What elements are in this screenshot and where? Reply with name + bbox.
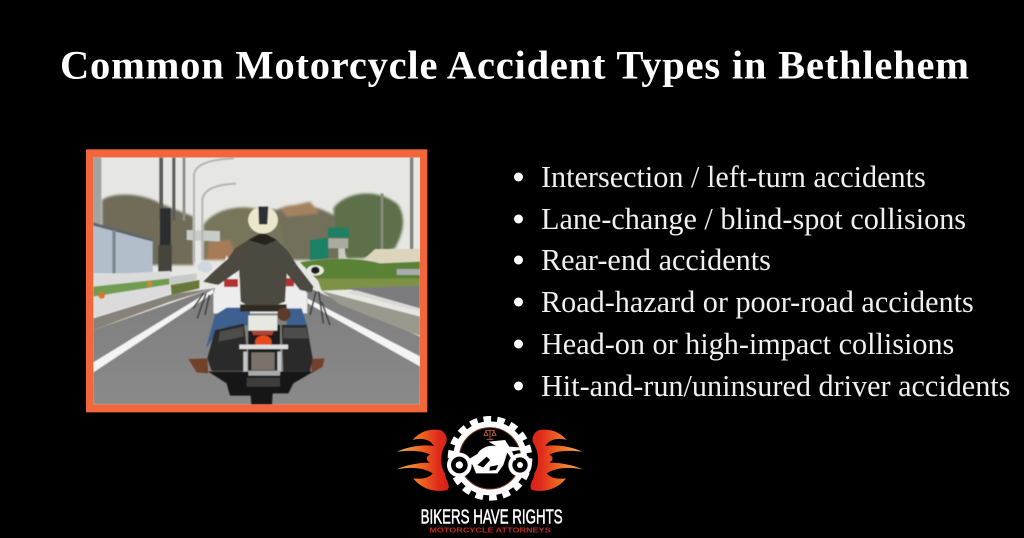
list item 5: Head-on or high-impact collisions	[541, 327, 954, 361]
list item 3: Rear-end accidents	[541, 243, 771, 277]
road surface	[93, 288, 420, 404]
road scene	[93, 157, 420, 404]
photo frame	[86, 149, 427, 412]
list: accident types	[514, 160, 1010, 403]
logo wordmark: BIKERS HAVE RIGHTS	[421, 506, 563, 528]
motorcycle lower body	[208, 372, 313, 404]
handlebar fringe	[193, 292, 330, 325]
icon: motorcycle	[447, 440, 532, 477]
car ahead	[213, 255, 307, 313]
mirrors	[198, 262, 212, 272]
icon: gear wheel	[451, 419, 529, 498]
jeans	[206, 308, 307, 348]
list item 2: Lane-change / blind-spot collisions	[541, 202, 966, 236]
title: Common Motorcycle Accident Types in Bethlehem	[60, 42, 969, 88]
icon: left flames	[397, 430, 449, 491]
saddlebags	[207, 323, 247, 371]
logo tagline: MOTORCYCLE ATTORNEYS	[429, 528, 551, 535]
list item 4: Road-hazard or poor-road accidents	[541, 285, 974, 319]
icon: scales	[484, 429, 496, 439]
list item 6: Hit-and-run/uninsured driver accidents	[541, 369, 1010, 403]
logo: Bikers Have Rights	[397, 419, 583, 535]
jacket	[203, 240, 313, 305]
helmet	[248, 206, 278, 234]
boots	[188, 358, 208, 373]
icon: right flames	[531, 430, 583, 491]
panel: motorcycle photo	[86, 149, 427, 412]
list item 1: Intersection / left-turn accidents	[541, 160, 926, 194]
